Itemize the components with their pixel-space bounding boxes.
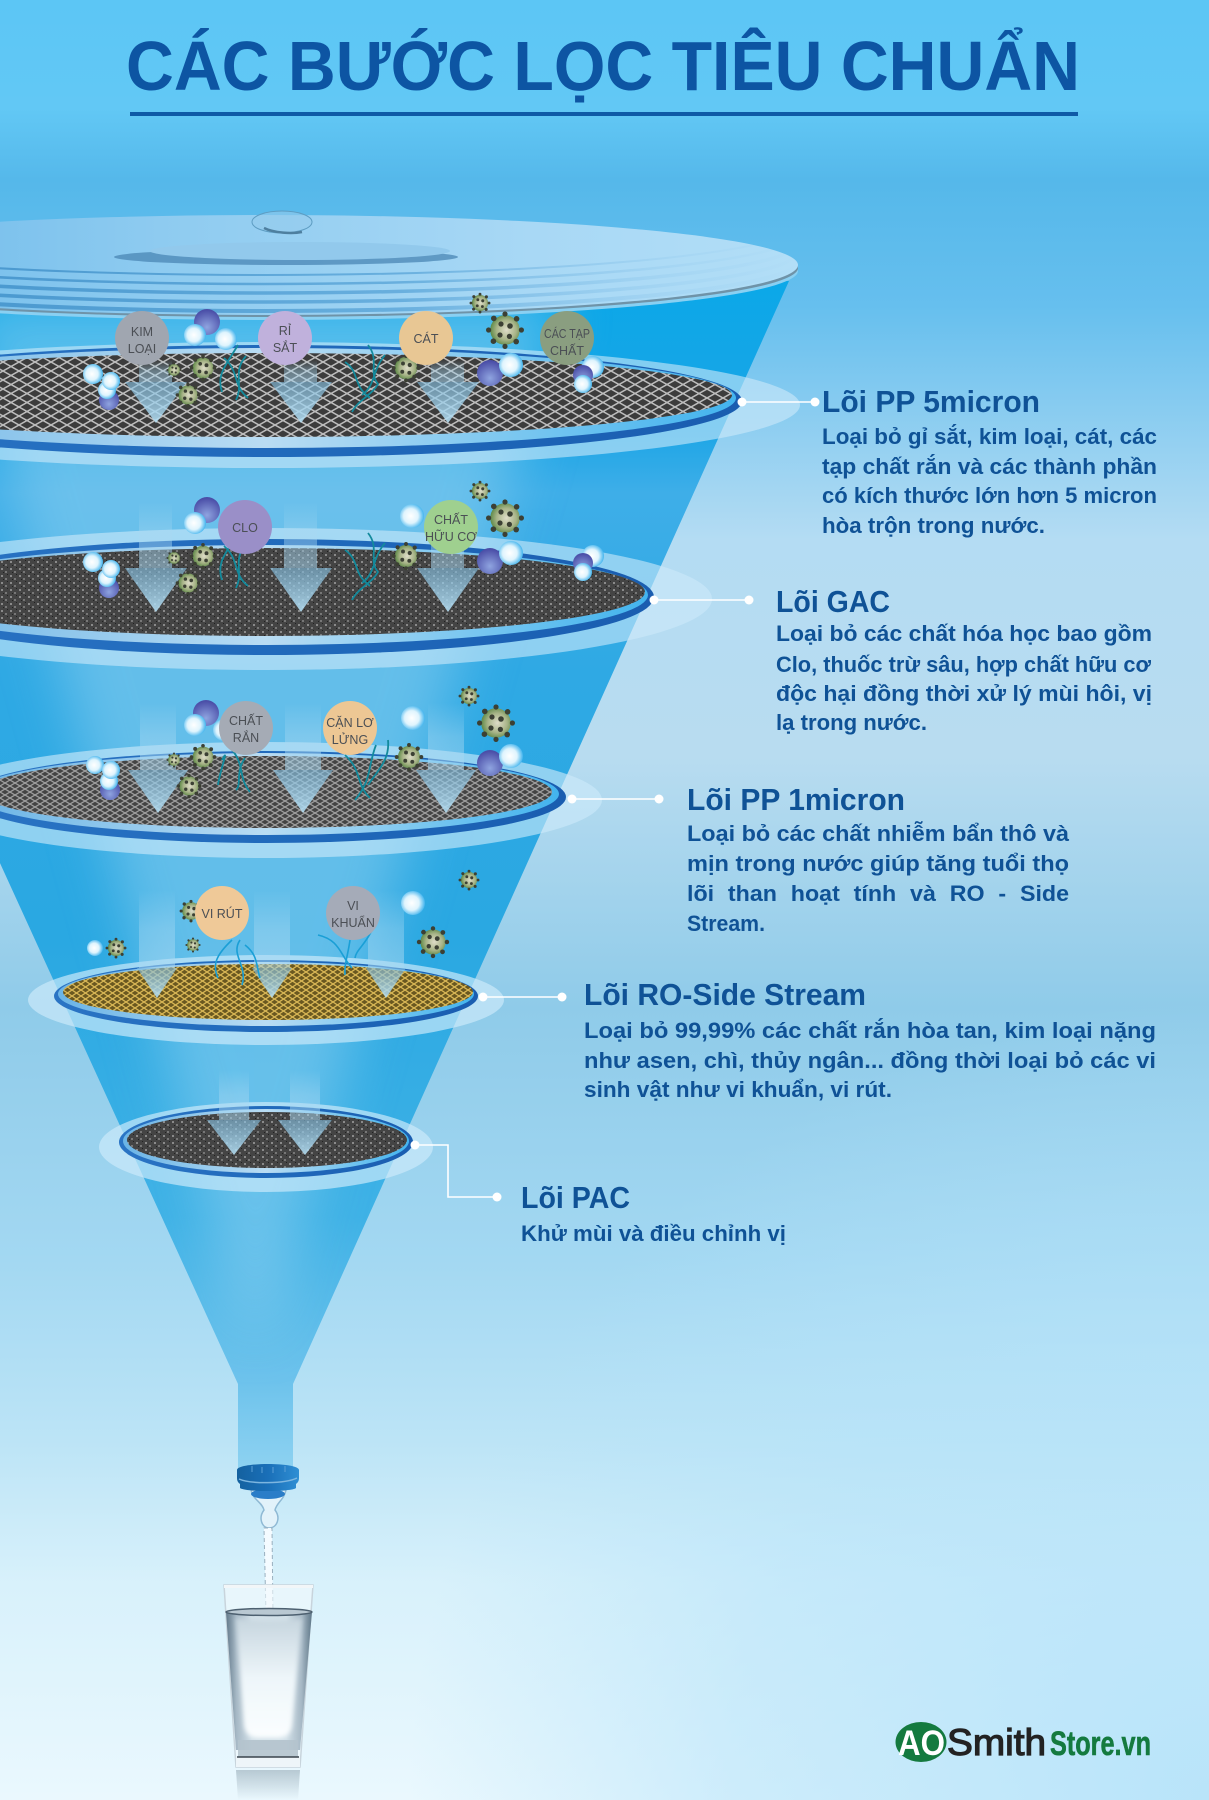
disc 2 contaminants [83, 481, 604, 600]
disc 4 blue ring [54, 960, 478, 1032]
disc 4 light band [58, 962, 474, 1026]
label: các tạp chất: CHẤT [550, 343, 584, 358]
ripple [114, 242, 458, 265]
disc 5 halo [99, 1102, 433, 1192]
text block: Lõi PAC: Khử mùi và điều chỉnh vị [521, 1221, 786, 1246]
text block: Lõi PAC [521, 1180, 786, 1246]
label: clo: CLO [232, 521, 258, 535]
disc 1 halo [0, 342, 800, 468]
text block: Lõi PP 5micron: Lõi PP 5micron [822, 384, 1040, 419]
label: rỉ sắt [258, 311, 312, 365]
logo: AO Smith Store.vn: Smith [947, 1722, 1046, 1763]
label: chất hữu cơ: HỮU CƠ [425, 529, 477, 544]
text block: Lõi RO-Side Stream: sinh vật như vi khuẩn, vi rút. [584, 1077, 892, 1102]
text block: Lõi PAC: Lõi PAC [521, 1180, 630, 1215]
disc 2 halo [0, 528, 712, 670]
disc 3 light band [0, 753, 559, 835]
funnel cone [0, 270, 800, 1470]
filter disc 5: PAC [99, 1070, 433, 1192]
text block: Lõi RO-Side Stream: Loại bỏ 99,99% các chất rắn hòa tan, kim loại nặng [584, 1018, 1156, 1043]
label: cặn lơ lửng: CẶN LƠ [326, 715, 374, 730]
disc 5 light band [123, 1109, 409, 1173]
disc 4 contaminants [87, 870, 479, 985]
label: cặn lơ lửng: LỬNG [332, 732, 368, 747]
text block: Lõi PP 5micron [822, 384, 1157, 538]
label: vi rút: VI RÚT [202, 906, 243, 921]
text block: Lõi PP 1micron [687, 782, 1070, 936]
label: clo [218, 500, 272, 554]
label: các tạp chất: CÁC TẠP [544, 326, 590, 341]
disc 3 halo [0, 742, 602, 858]
icon: bottle cap and nipple [237, 1464, 299, 1528]
text block: Lõi PP 5micron: Loại bỏ gỉ sắt, kim loại, cát, các [822, 424, 1157, 449]
label: chất rắn: RẮN [233, 730, 259, 745]
text block: Lõi RO-Side Stream: như asen, chì, thủy ngân... đồng thời loại bỏ các vi [584, 1048, 1156, 1073]
disc 2 gravel [0, 548, 645, 636]
disc 2 flow arrows [125, 502, 479, 612]
filter disc 3: PP 1 micron [0, 686, 602, 858]
label: vi rút [195, 886, 249, 940]
disc 5 flow arrows [207, 1070, 332, 1155]
label: vi khuẩn: VI [347, 899, 359, 913]
disc 4 halo [28, 955, 504, 1045]
disc 3 flow arrows [128, 703, 476, 813]
disc 2 blue ring [0, 539, 654, 655]
text block: Lõi GAC: Clo, thuốc trừ sâu, hợp chất hữu cơ [776, 652, 1151, 677]
disc 1 light band [0, 348, 736, 448]
disc 1 mesh [0, 353, 732, 437]
disc 5 gravel [127, 1112, 407, 1168]
label: cát: CÁT [414, 331, 439, 346]
filter disc 1: PP 5 micron [0, 293, 800, 468]
text block: Lõi GAC: độc hại đồng thời xử lý mùi hôi, vị [776, 681, 1152, 706]
text block: Lõi PP 1micron: mịn trong nước giúp tăng tuổi thọ [687, 851, 1069, 876]
label: cặn lơ lửng [323, 701, 377, 755]
label: kim loại: LOẠI [128, 342, 156, 356]
label: rỉ sắt: RỈ [279, 323, 292, 338]
title: CÁC BƯỚC LỌC TIÊU CHUẨN [126, 26, 1080, 105]
label: chất rắn: CHẤT [229, 713, 263, 728]
text block: Lõi GAC: Lõi GAC [776, 584, 890, 619]
logo: AO Smith Store.vn: Store.vn [1050, 1725, 1151, 1763]
text block: Lõi RO-Side Stream: Lõi RO-Side Stream [584, 977, 866, 1012]
filter disc 4: RO-Side Stream [28, 870, 504, 1045]
disc 1 flow arrows [125, 360, 479, 423]
label: cát [399, 311, 453, 365]
filter disc 2: GAC [0, 481, 712, 670]
label: vi khuẩn [326, 886, 380, 940]
text block: Lõi GAC: Loại bỏ các chất hóa học bao gồm [776, 621, 1152, 646]
disc 1 blue ring [0, 345, 742, 457]
disc 1 contaminants [83, 293, 604, 412]
label: chất hữu cơ: CHẤT [434, 512, 468, 527]
text block: Lõi PP 1micron: Lõi PP 1micron [687, 782, 905, 817]
text block: Lõi PP 1micron: lõi than hoạt tính và RO - Side [687, 881, 1069, 906]
label: vi khuẩn: KHUẨN [331, 915, 375, 930]
connector lines [410, 398, 820, 1202]
label: các tạp chất [540, 311, 594, 365]
label: kim loại [115, 311, 169, 365]
disc 4 gold mesh [63, 964, 473, 1020]
icon: glass of water [224, 1585, 313, 1800]
disc 3 mesh [0, 756, 552, 828]
text block: Lõi PP 1micron: Loại bỏ các chất nhiễm bẩn thô và [687, 821, 1070, 846]
water surface [0, 210, 798, 320]
text block: Lõi GAC: lạ trong nước. [776, 710, 927, 735]
label: chất rắn [219, 701, 273, 755]
logo: AO Smith Store.vn [896, 1722, 1151, 1763]
disc 5 blue ring [119, 1106, 413, 1178]
disc 3 contaminants [86, 686, 523, 800]
logo badge: AO [898, 1724, 945, 1763]
disc 3 blue ring [0, 751, 566, 843]
label: chất hữu cơ [424, 500, 478, 554]
text block: Lõi PP 5micron: có kích thước lớn hơn 5 micron [822, 483, 1157, 508]
text block: Lõi PP 1micron: Stream. [687, 911, 765, 936]
disc 2 light band [0, 545, 648, 645]
text block: Lõi PP 5micron: hòa trộn trong nước. [822, 513, 1045, 538]
label: rỉ sắt: SẮT [273, 340, 298, 355]
disc 4 flow arrows [137, 890, 406, 998]
label: kim loại: KIM [131, 325, 153, 339]
text block: Lõi RO-Side Stream [584, 977, 1156, 1102]
water droplet [252, 211, 312, 233]
text block: Lõi PP 5micron: tạp chất rắn và các thành phần [822, 454, 1157, 479]
icon: water stream [264, 1528, 273, 1615]
text block: Lõi GAC [776, 584, 1152, 735]
